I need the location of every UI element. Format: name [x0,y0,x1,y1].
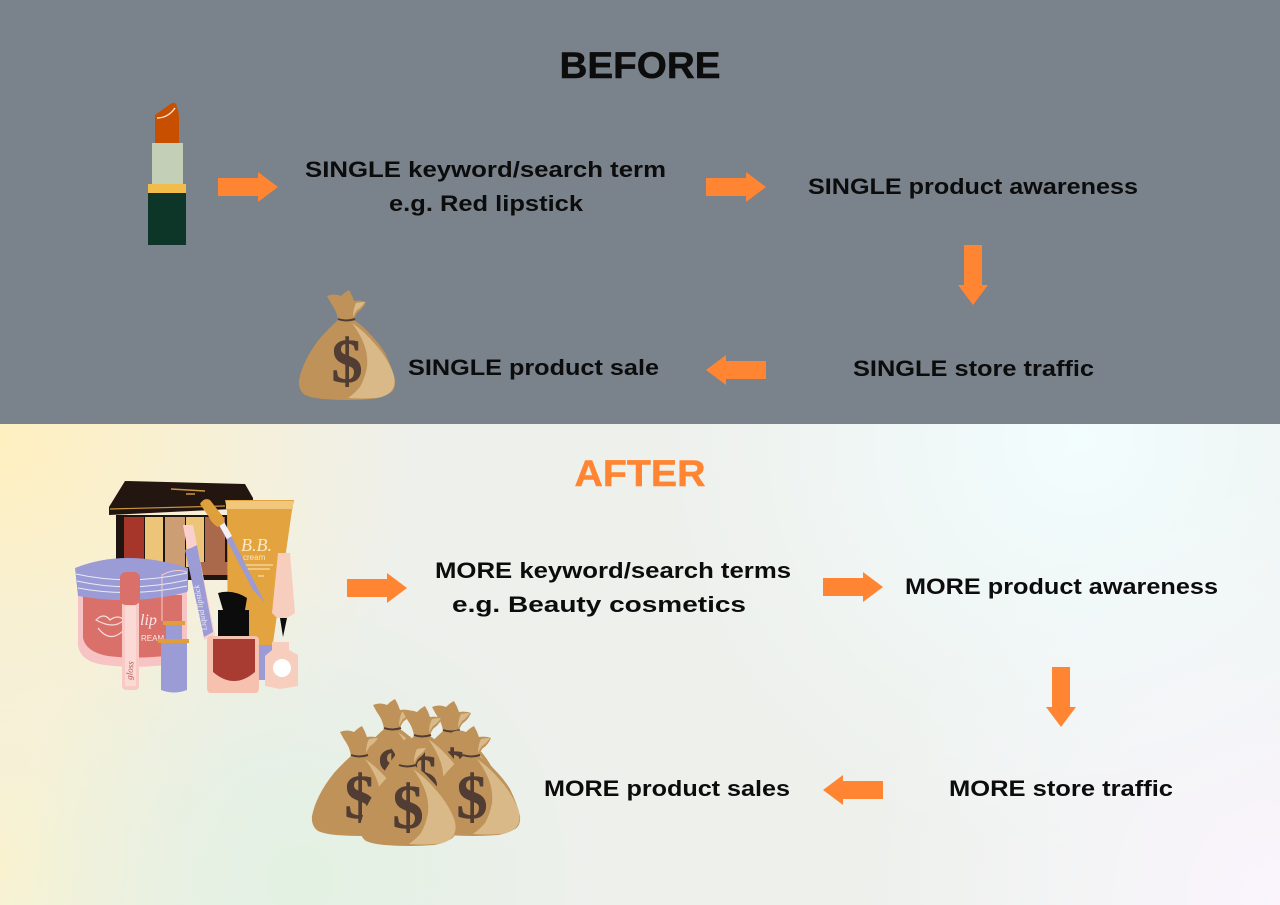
gloss tube: gloss [124,660,136,680]
text: single product sale: SINGLE product sale [408,355,659,380]
heading: before: BEFORE [560,45,720,86]
liquid lipstick: Liquid lipstick [192,584,209,632]
jar: lip [140,612,157,629]
panel: before background [0,0,1280,424]
dropper applicator [200,499,265,603]
arrow: lipstick to keyword [218,172,278,202]
icon: pile of money bags: $ [456,764,488,832]
arrow: keywords to awareness [823,572,883,602]
text: single product awareness: SINGLE product awareness [808,174,1138,199]
arrow: traffic to sales [823,775,883,805]
icon: pile of money bags: $ [378,737,408,805]
icon: pile of money bags: $ [344,764,376,832]
arrow: awareness to traffic [1046,667,1076,727]
liquid lipstick [183,525,215,640]
text: more keywords: e.g. Beauty cosmetics [452,592,746,617]
icon: pile of money bags: $ [436,739,468,807]
text: single keyword: e.g. Red lipstick [389,191,584,216]
icon: pile of money bags [312,699,520,846]
icon: pile of money bags: $ [392,774,424,842]
panel: after background [0,424,1280,905]
text: more keywords [435,558,791,617]
BB cream tube: cream [243,553,266,562]
arrow: awareness to traffic [958,245,988,305]
icon: money bag: $ [332,328,362,396]
text: single store traffic: SINGLE store traffic [853,356,1094,381]
text: more product awareness: MORE product awareness [905,574,1218,599]
icon: pile of money bags: $ [408,744,438,812]
icon: lipstick [148,103,186,245]
heading: after: AFTER [574,453,706,494]
icon: money bag [299,290,395,400]
text: more product sales: MORE product sales [544,776,790,801]
arrow: cosmetics to keywords [347,573,407,603]
arrow: keyword to awareness [706,172,766,202]
jar [75,558,188,667]
text: single keyword [305,157,666,216]
nail polish [207,592,259,693]
gloss tube [120,572,140,690]
arrow: traffic to sale [706,355,766,385]
jar: REAM [141,634,164,643]
BB cream tube: B.B. [241,535,272,555]
BB cream tube [225,500,294,680]
lilac bottle [158,621,189,692]
eyeliner [265,553,298,689]
icon: cosmetics collection [75,481,298,693]
palette [109,481,253,580]
text: more store traffic: MORE store traffic [949,776,1173,801]
text: single keyword: SINGLE keyword/search term [305,157,666,182]
text: more keywords: MORE keyword/search terms [435,558,791,583]
